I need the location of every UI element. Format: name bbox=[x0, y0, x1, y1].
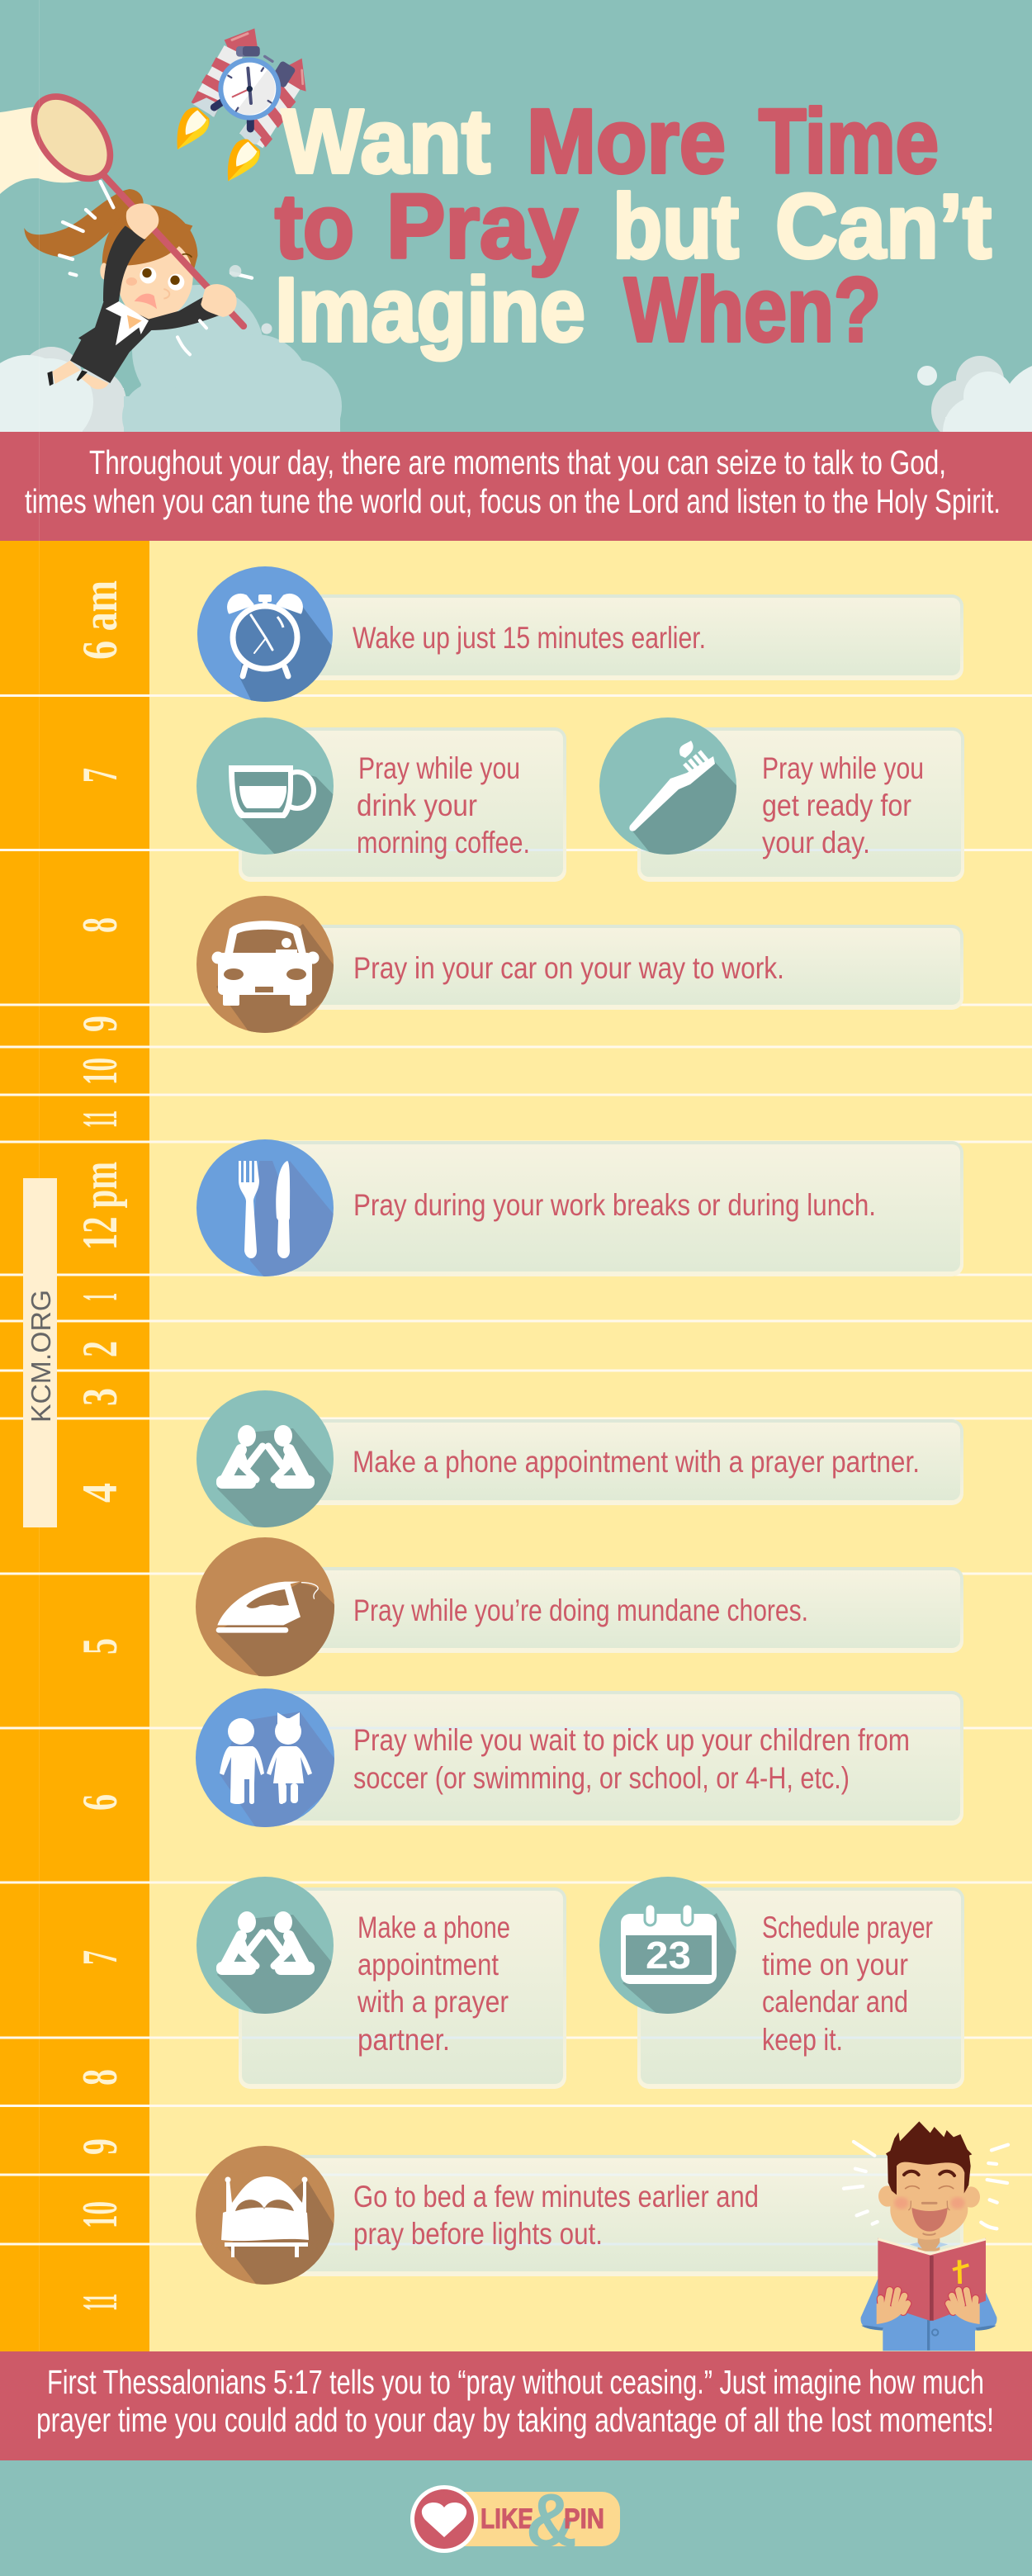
card: prayer partner bbox=[239, 1887, 566, 2089]
panel: hour column bbox=[0, 541, 149, 2351]
card: morning coffee: morning coffee. bbox=[357, 826, 530, 859]
card: bedtime: pray before lights out. bbox=[353, 2217, 603, 2251]
sidebar tag: KCM.ORG bbox=[23, 1178, 57, 1527]
hour labels: 8 bbox=[73, 917, 127, 933]
hour labels: 1 bbox=[73, 1293, 127, 1301]
card: calendar bbox=[637, 1887, 964, 2089]
title: to bbox=[275, 176, 354, 277]
card: wake up: Wake up just 15 minutes earlier. bbox=[353, 621, 706, 655]
hour labels: 8 bbox=[73, 2069, 127, 2086]
card: calendar: Schedule prayer bbox=[762, 1911, 933, 1944]
icon: two people praying bbox=[196, 1390, 334, 1527]
card: calendar: keep it. bbox=[762, 2023, 843, 2057]
card: children bbox=[248, 1691, 963, 1825]
card: children: soccer (or swimming, or school, or 4-H, etc.) bbox=[353, 1761, 850, 1795]
face bbox=[100, 212, 202, 329]
title: When? bbox=[624, 259, 881, 361]
rocket left bbox=[192, 28, 258, 117]
card: lunch: Pray during your work breaks or during lunch. bbox=[353, 1188, 876, 1222]
card: bedtime: Go to bed a few minutes earlier and bbox=[353, 2180, 759, 2214]
hour labels: 4 bbox=[73, 1483, 127, 1503]
hour labels: 10 bbox=[73, 1058, 127, 1085]
illustration: clouds right bbox=[917, 356, 1032, 467]
card: get ready bbox=[637, 727, 964, 882]
hour labels: 11 bbox=[73, 1110, 127, 1128]
card: chores bbox=[248, 1567, 963, 1653]
card: wake up bbox=[248, 594, 963, 680]
icon: bed bbox=[196, 2146, 334, 2285]
card: car: Pray in your car on your way to work. bbox=[353, 951, 784, 985]
illustration: rocket alarm clock bbox=[178, 28, 306, 181]
clock body bbox=[214, 46, 296, 129]
title: but bbox=[613, 176, 739, 277]
handle and hands bbox=[103, 175, 244, 326]
hour labels: 10 bbox=[73, 2201, 127, 2228]
panel: timeline background bbox=[149, 541, 1032, 2351]
card: calendar: time on your bbox=[762, 1948, 908, 1982]
icon: car bbox=[196, 896, 334, 1033]
title: Can’t bbox=[775, 176, 992, 277]
icon: calendar bbox=[599, 1877, 736, 2014]
illustration: clouds left bbox=[0, 285, 342, 454]
card: children: Pray while you wait to pick up your children from bbox=[353, 1723, 910, 1757]
panel: intro banner bbox=[0, 432, 1032, 541]
logo: like and pin: PIN bbox=[564, 2503, 604, 2535]
card: car bbox=[248, 925, 963, 1010]
closing text bbox=[36, 2363, 994, 2439]
jacket bbox=[70, 225, 220, 383]
icon: iron bbox=[196, 1537, 334, 1676]
card: morning coffee: Pray while you bbox=[358, 751, 520, 785]
card: get ready: get ready for bbox=[762, 788, 911, 822]
card: bedtime bbox=[248, 2155, 963, 2276]
title: Pray bbox=[386, 176, 578, 277]
icon: children bbox=[196, 1688, 334, 1827]
sidebar tag: KCM.ORG: KCM.ORG bbox=[26, 1290, 56, 1423]
card: prayer partner: Make a phone bbox=[357, 1911, 510, 1944]
card: lunch bbox=[248, 1141, 963, 1276]
intro text bbox=[25, 443, 1001, 520]
card: phone appointment bbox=[248, 1419, 963, 1505]
panel: header background bbox=[0, 0, 1032, 432]
card: morning coffee bbox=[239, 727, 566, 882]
card: phone appointment: Make a phone appointment with a prayer partner. bbox=[353, 1445, 920, 1479]
title: Want bbox=[282, 91, 490, 192]
illustration: happy man reading bible bbox=[844, 2121, 1008, 2351]
book bbox=[878, 2238, 986, 2321]
hour labels: 6 am bbox=[73, 580, 127, 660]
flames bbox=[178, 107, 260, 181]
legs bbox=[47, 361, 109, 389]
card: prayer partner: partner. bbox=[357, 2023, 450, 2057]
card: chores: Pray while you’re doing mundane chores. bbox=[353, 1593, 808, 1627]
hour labels: 11 bbox=[73, 2294, 127, 2311]
card: get ready: Pray while you bbox=[762, 751, 924, 785]
icon: coffee cup bbox=[196, 717, 334, 855]
motion lines bbox=[844, 2142, 1008, 2228]
card: prayer partner: with a prayer bbox=[357, 1985, 509, 2019]
title: More bbox=[527, 91, 726, 192]
title bbox=[275, 91, 992, 361]
head bbox=[878, 2121, 980, 2252]
logo: like and pin bbox=[410, 2479, 620, 2563]
card: morning coffee: drink your bbox=[357, 788, 477, 822]
hour labels: 5 bbox=[73, 1638, 127, 1655]
card: prayer partner: appointment bbox=[357, 1948, 499, 1982]
card: get ready: your day. bbox=[762, 826, 870, 859]
rocket right bbox=[239, 59, 306, 148]
hour labels: 7 bbox=[73, 1950, 127, 1965]
hour labels: 9 bbox=[73, 1016, 127, 1032]
hour labels: 7 bbox=[73, 768, 127, 783]
logo: like and pin: & bbox=[526, 2479, 577, 2563]
icon: praying partners (second) bbox=[196, 1877, 334, 2014]
title: Time bbox=[759, 91, 939, 192]
hour labels: 12 pm bbox=[73, 1162, 127, 1250]
shirt bbox=[861, 2279, 996, 2351]
hour labels: 3 bbox=[73, 1388, 127, 1406]
hands bbox=[877, 2290, 907, 2324]
title: Imagine bbox=[275, 259, 585, 361]
logo: like and pin: LIKE bbox=[480, 2503, 533, 2535]
motion lines bbox=[59, 182, 252, 354]
card: calendar: calendar and bbox=[762, 1985, 908, 2019]
hair bbox=[24, 189, 197, 270]
icon: alarm clock bbox=[197, 566, 333, 702]
panel: closing banner bbox=[0, 2351, 1032, 2460]
icon: toothbrush bbox=[599, 717, 736, 855]
hour labels bbox=[73, 580, 127, 2311]
panel: footer bbox=[0, 2460, 1032, 2576]
icon: calendar: 23 bbox=[646, 1934, 691, 1977]
hour labels: 6 bbox=[73, 1794, 127, 1811]
net bbox=[0, 83, 125, 194]
icon: fork and knife bbox=[196, 1139, 334, 1276]
hour labels: 9 bbox=[73, 2138, 127, 2155]
hour labels: 2 bbox=[73, 1341, 127, 1357]
illustration: woman chasing with net bbox=[0, 83, 252, 389]
